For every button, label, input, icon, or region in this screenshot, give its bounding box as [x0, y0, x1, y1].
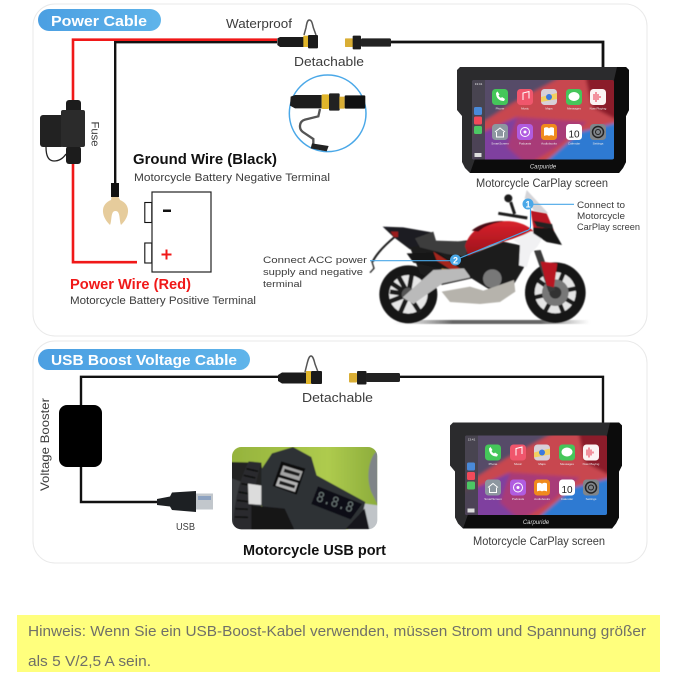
callouts: motorcycle connection points: 1 [525, 200, 531, 210]
device: motorcycle CarPlay screen: 13:41 [468, 438, 476, 442]
heading: Power Cable: Power Cable [51, 13, 147, 30]
device: motorcycle CarPlay screen: Settings [586, 497, 597, 501]
device: motorcycle CarPlay screen: 10 [568, 130, 580, 140]
device: motorcycle CarPlay screen: SmartScreen [491, 142, 509, 146]
label: Fuse: Fuse [88, 122, 100, 146]
label: ground wire [133, 151, 330, 184]
device: motorcycle CarPlay screen: Podcasts [512, 497, 525, 501]
device: motorcycle CarPlay screen: Audiobooks [541, 142, 557, 146]
device: motorcycle CarPlay screen: Maps [545, 106, 553, 110]
device: motorcycle CarPlay screen: Phone [496, 106, 505, 110]
label: power wire: Power Wire (Red) [70, 276, 191, 293]
icon: ring terminal [103, 183, 128, 225]
label: Detachable: Detachable [294, 55, 364, 69]
label: Motorcycle USB port: Motorcycle USB port [243, 543, 386, 559]
label: connect to screen: Motorcycle [577, 211, 625, 222]
device: motorcycle CarPlay screen: Settings [593, 142, 604, 146]
heading: Power Cable [38, 9, 161, 31]
device: motorcycle CarPlay screen [450, 422, 622, 528]
label: connect to screen: CarPlay screen [577, 222, 640, 233]
label: connect ACC power: terminal [263, 279, 302, 290]
device: motorcycle CarPlay screen: Calendar [568, 142, 580, 146]
device: motorcycle CarPlay screen [457, 67, 629, 173]
label: ground wire: Ground Wire (Black) [133, 151, 277, 168]
red power wire [73, 40, 277, 262]
label: power wire: Motorcycle Battery Positive Terminal [70, 295, 256, 307]
callouts: motorcycle connection points: 2 [453, 256, 458, 266]
heading: USB Boost Voltage Cable [38, 349, 250, 370]
label: connect to screen: Connect to [577, 200, 625, 211]
icon: voltage booster [59, 405, 102, 467]
label: Motorcycle CarPlay screen: Motorcycle CarPlay screen [473, 536, 605, 548]
icon: fuse [40, 100, 85, 164]
device: motorcycle CarPlay screen: Carpuride [523, 520, 550, 526]
device: motorcycle CarPlay screen: Now Playing [583, 462, 600, 466]
cable: booster to USB and connector [81, 377, 278, 502]
black ground wire [115, 42, 277, 184]
photo: motorcycle USB port: 8.8.8 [314, 488, 356, 517]
device: motorcycle CarPlay screen: Now Playing [590, 106, 607, 110]
label: Detachable: Detachable [302, 391, 373, 405]
device: motorcycle CarPlay screen: Podcasts [519, 142, 532, 146]
device: motorcycle CarPlay screen: Messages [560, 462, 574, 466]
label: connect ACC power: supply and negative [263, 267, 363, 278]
label: Waterproof: Waterproof [226, 17, 293, 31]
label: Motorcycle CarPlay screen: Motorcycle CarPlay screen [476, 178, 608, 190]
label: connect ACC power: Connect ACC power [263, 255, 367, 266]
device: motorcycle CarPlay screen: 13:41 [475, 82, 483, 86]
cable to screen [391, 42, 603, 68]
callout: note: als 5 V/2,5 A sein. [28, 653, 151, 670]
label: ground wire: Motorcycle Battery Negative Terminal [134, 172, 330, 184]
label: Voltage Booster: Voltage Booster [38, 398, 52, 491]
label: power wire [70, 276, 256, 307]
label: connect to screen [577, 200, 640, 233]
device: motorcycle CarPlay screen: 10 [561, 485, 573, 496]
icon: waterproof connector [277, 20, 318, 48]
panel: power cable [33, 4, 647, 336]
icon: USB plug [157, 491, 213, 512]
device: motorcycle CarPlay screen: Phone [489, 462, 498, 466]
cable to screen [400, 377, 603, 424]
icon: detachable connector [349, 371, 400, 384]
device: motorcycle CarPlay screen: Maps [538, 462, 546, 466]
illustration: motorcycle [370, 190, 590, 324]
heading: USB Boost Voltage Cable: USB Boost Voltage Cable [51, 352, 237, 369]
device: motorcycle CarPlay screen: Audiobooks [534, 497, 550, 501]
callout: note: Hinweis: Wenn Sie ein USB-Boost-Kabel verwenden, müssen Strom und Spannung größer [28, 623, 646, 640]
device: motorcycle CarPlay screen: Carpuride [530, 164, 557, 170]
device: motorcycle CarPlay screen: Calendar [561, 497, 573, 501]
panel: USB boost voltage cable [33, 341, 647, 563]
device: motorcycle CarPlay screen: Music [514, 462, 522, 466]
device: motorcycle CarPlay screen: Music [521, 106, 529, 110]
label: connect ACC power [263, 255, 367, 290]
icon: connector with loop [278, 356, 322, 384]
label: USB: USB [176, 522, 195, 533]
photo: motorcycle USB port [232, 447, 378, 530]
icon: battery [145, 192, 211, 272]
callout: note [17, 615, 660, 672]
device: motorcycle CarPlay screen: Messages [567, 106, 581, 110]
icon: detachable connector [345, 36, 391, 49]
device: motorcycle CarPlay screen: SmartScreen [484, 497, 502, 501]
callout: connector detail circle [289, 75, 366, 152]
callouts: motorcycle connection points [370, 198, 574, 266]
